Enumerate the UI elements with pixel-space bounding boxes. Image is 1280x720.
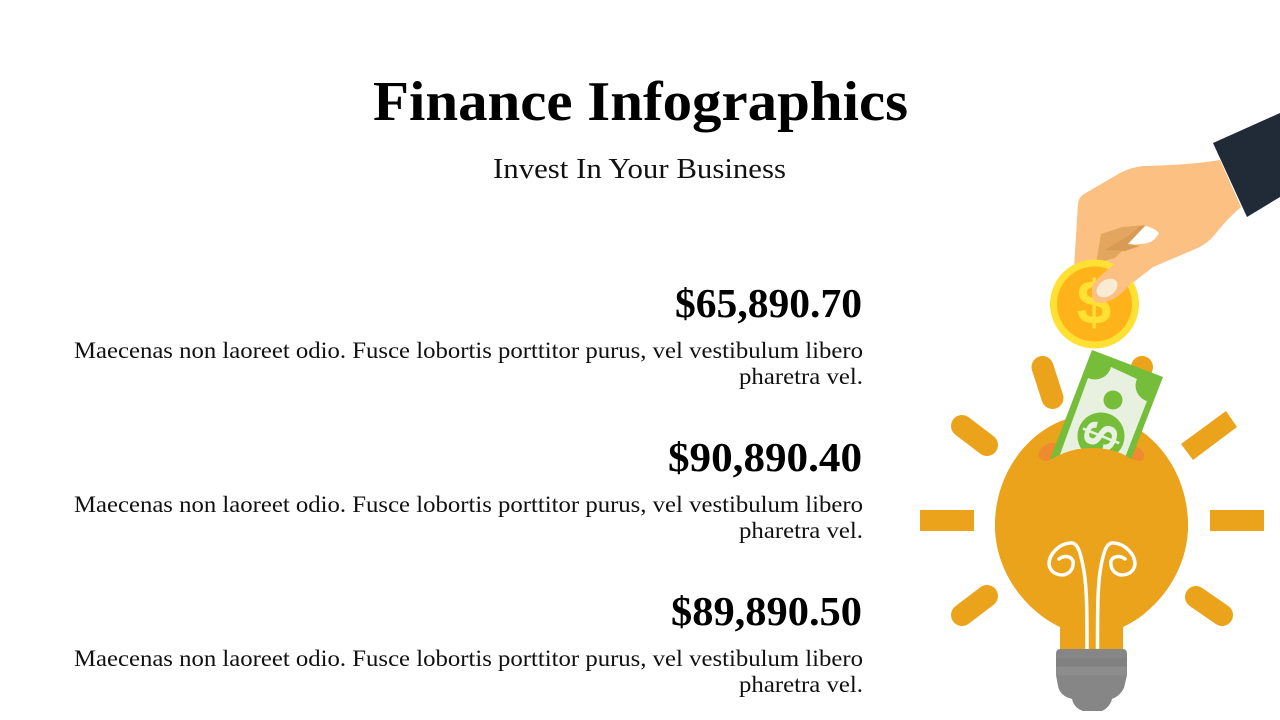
- text block: amount three: [74, 588, 863, 697]
- icon: light bulb rays: [920, 367, 1264, 615]
- icon: gold coin: $: [1077, 269, 1111, 338]
- icon: gold coin: [1050, 260, 1139, 348]
- icon: bulb filaments: [1049, 543, 1135, 648]
- subtitle: Invest In Your Business: [493, 153, 786, 185]
- icon: hand: [1074, 160, 1241, 285]
- icon: light bulb front lobe: [995, 448, 1188, 652]
- text block: amount two: $90,890.40: [668, 434, 862, 480]
- icon: dollar bill: [1049, 350, 1163, 462]
- icon: sleeve: [1213, 113, 1280, 217]
- icon: bulb screw base: [1056, 649, 1127, 711]
- icon: thumb and nail: [1092, 243, 1168, 303]
- text block: amount three: pharetra vel.: [739, 672, 863, 697]
- text block: amount one: pharetra vel.: [739, 364, 863, 389]
- text block: amount two: [74, 434, 863, 543]
- text block: amount three: $89,890.50: [671, 588, 862, 634]
- text block: amount one: [74, 280, 863, 389]
- icon: light bulb back dome: [995, 415, 1188, 652]
- text block: amount one: $65,890.70: [675, 280, 862, 326]
- title: Finance Infographics: [373, 71, 908, 133]
- text block: amount three: Maecenas non laoreet odio. Fusce lobortis porttitor purus, vel vestibulum libero: [74, 646, 863, 671]
- icon: dollar bill: $: [1072, 414, 1131, 458]
- text block: amount two: Maecenas non laoreet odio. Fusce lobortis porttitor purus, vel vestibulum libero: [74, 492, 863, 517]
- icon: bulb slot: [1036, 439, 1146, 465]
- text block: amount two: pharetra vel.: [739, 518, 863, 543]
- text block: amount one: Maecenas non laoreet odio. Fusce lobortis porttitor purus, vel vestibulum libero: [74, 338, 863, 363]
